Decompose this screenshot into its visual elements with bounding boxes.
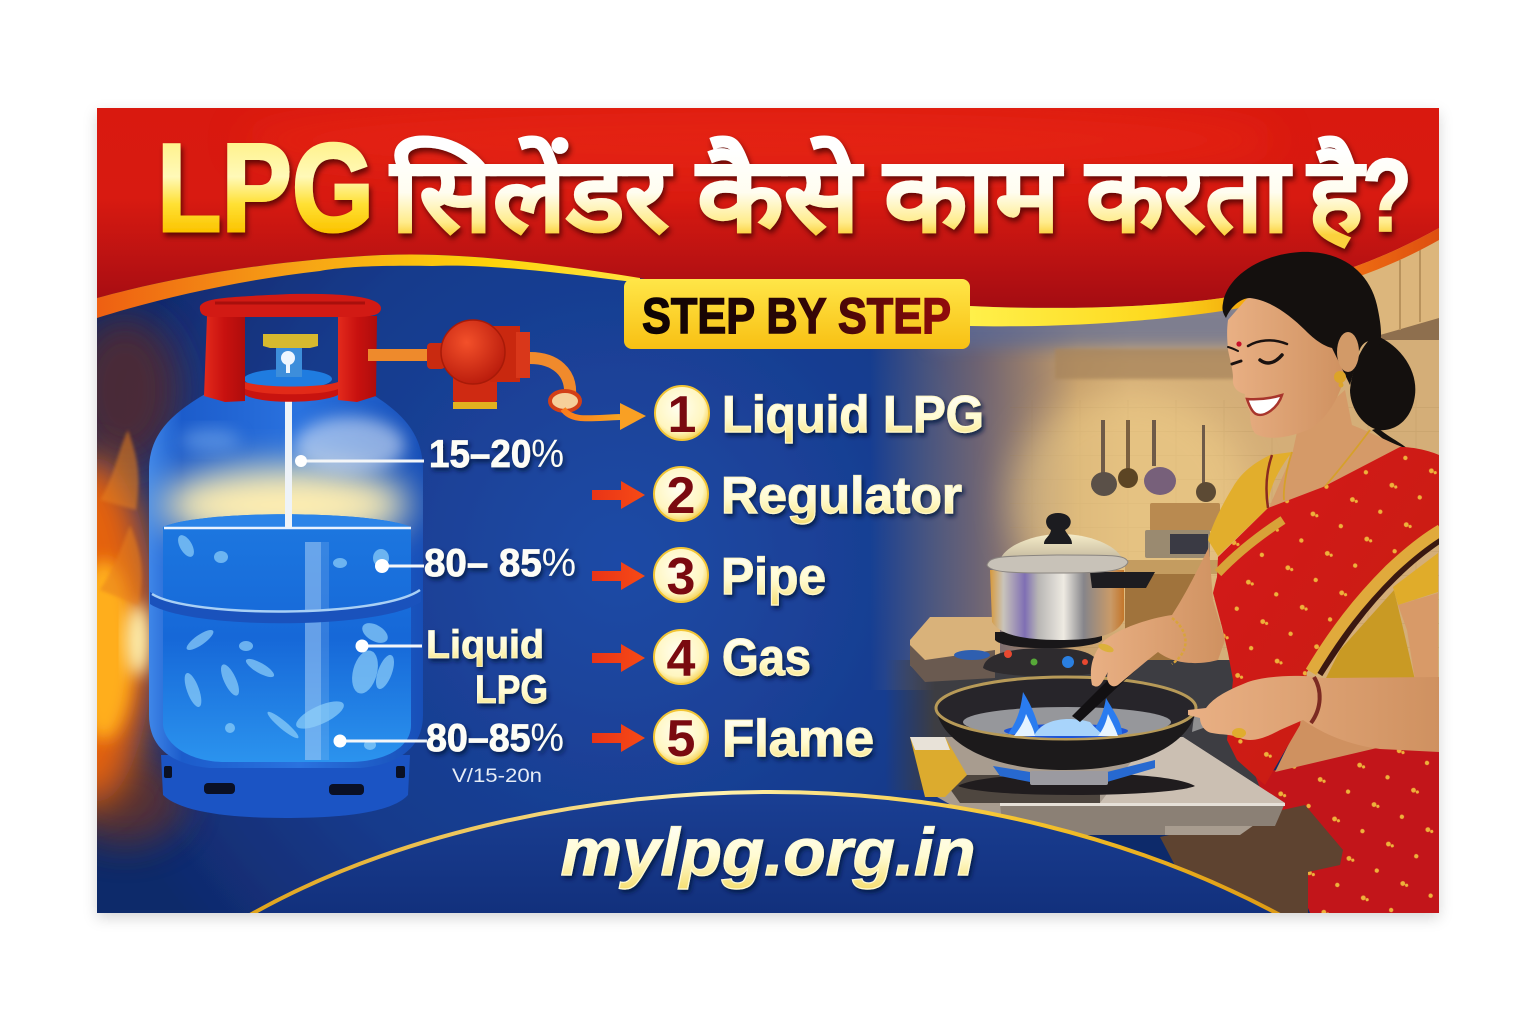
bubbles <box>175 533 398 750</box>
callout: Liquid LPG <box>356 623 548 712</box>
burner under the pot <box>983 648 1100 676</box>
liquid LPG <box>163 514 411 762</box>
step 2: Regulator <box>592 467 962 525</box>
stove front edge <box>1000 803 1285 835</box>
icon: woman's arms and hands <box>1091 547 1439 752</box>
upper cabinets <box>1354 228 1439 340</box>
underskirt <box>1325 590 1415 680</box>
title: Hindi: कैसे <box>695 136 864 254</box>
dark counter <box>885 660 1260 790</box>
lower sari <box>1255 746 1439 913</box>
step list <box>592 386 984 768</box>
yellow foil <box>910 737 967 797</box>
callout: 80-85% lower <box>334 717 564 787</box>
icon: frying pan with flame <box>936 660 1220 770</box>
poster artwork <box>30 100 1441 915</box>
step 1: Liquid LPG: 1 <box>668 386 696 444</box>
banner red <box>97 108 1439 308</box>
callout: Liquid LPG: Liquid <box>426 623 544 667</box>
ring <box>1097 642 1115 654</box>
step 3: Pipe <box>592 548 826 606</box>
hanging utensils <box>1091 420 1216 502</box>
step 3: Pipe: Pipe <box>721 548 826 606</box>
step 2: Regulator: 2 <box>667 467 695 525</box>
red sari <box>1213 447 1439 785</box>
sari gold border <box>1218 520 1441 672</box>
bindi <box>1236 341 1242 347</box>
bangle <box>1311 677 1320 723</box>
step 4: Gas: 4 <box>667 630 696 688</box>
panel: woman cooking <box>1208 252 1441 913</box>
blue flame <box>1004 692 1128 738</box>
panel: fire backdrop <box>97 304 204 866</box>
callout: 80-85% upper: 80– 85% <box>424 542 576 585</box>
step 5: Flame: 5 <box>667 710 695 768</box>
title: Hindi: काम <box>882 138 1064 254</box>
callout: 80-85% lower: V/15-20n <box>452 766 542 787</box>
step 5: Flame: Flame <box>722 710 874 768</box>
panel: gas stove and counter <box>910 737 1343 913</box>
title: Hindi: ? <box>1362 138 1412 254</box>
smile <box>1247 395 1282 415</box>
forearm and hand <box>1188 676 1439 752</box>
title: Hindi <box>389 136 1412 254</box>
sari motifs <box>1214 455 1437 758</box>
sleeve and upper arm <box>1393 553 1438 680</box>
panel: header banner <box>97 100 1439 326</box>
step 2: Regulator: Regulator <box>721 467 962 525</box>
burner ring <box>993 760 1155 785</box>
stove top <box>925 737 1285 835</box>
face <box>1227 295 1345 438</box>
website URL: mylpg.org.in <box>560 815 976 890</box>
gold bangle <box>1172 618 1186 664</box>
necklace <box>1284 430 1370 500</box>
title: Hindi: है <box>1306 136 1367 254</box>
callout: 15-20%: 15–20% <box>429 433 564 476</box>
back counter items <box>1125 503 1220 664</box>
step 3: Pipe: 3 <box>667 548 695 606</box>
step 4: Gas <box>592 629 811 688</box>
title <box>160 135 1414 255</box>
neck <box>1268 390 1402 510</box>
midriff <box>1275 720 1376 772</box>
burner grate <box>958 773 1195 795</box>
range hood shelf <box>1055 349 1245 379</box>
gas space glow <box>160 417 410 543</box>
left arm <box>1091 547 1225 687</box>
callout: 15-20% <box>295 433 564 476</box>
title: Hindi: करता <box>1084 138 1293 254</box>
step 5: Flame <box>592 710 874 768</box>
icon: regulator and hose <box>368 320 646 430</box>
red collar handle <box>200 294 381 402</box>
ribbon: right <box>970 228 1439 326</box>
callout: 80-85% lower: 80–85% <box>426 717 564 760</box>
dip tube <box>285 396 292 528</box>
badge: step by step: STEP BY STEP <box>642 288 951 344</box>
wooden counter <box>1160 805 1343 913</box>
blouse <box>1208 452 1292 556</box>
title: LPG: LPG <box>157 119 374 258</box>
cylinder base ring <box>161 755 410 818</box>
step 1: Liquid LPG: Liquid LPG <box>722 386 984 444</box>
panel: kitchen background <box>870 228 1440 790</box>
ear and earring <box>1334 332 1359 388</box>
cylinder body <box>149 394 423 768</box>
ribbon: left <box>97 254 640 318</box>
neck valve <box>244 334 332 389</box>
hose <box>530 358 570 396</box>
step 4: Gas: Gas <box>722 629 811 687</box>
spatula <box>1072 660 1138 722</box>
hair <box>1222 252 1381 385</box>
icon: cooking pot <box>983 513 1155 676</box>
icon: LPG cylinder <box>149 294 423 818</box>
ring <box>1232 728 1246 738</box>
panel: footer arc <box>250 792 1280 915</box>
cylinder band <box>150 590 421 623</box>
panel: poster background <box>97 108 1439 913</box>
callout: Liquid LPG: LPG <box>475 668 548 712</box>
eyes and brows <box>1228 340 1287 364</box>
left burner plate <box>910 617 1000 682</box>
title: Hindi: सिलेंडर <box>389 136 673 254</box>
arrow to step 1 <box>563 409 620 418</box>
hair bun <box>1350 335 1415 449</box>
